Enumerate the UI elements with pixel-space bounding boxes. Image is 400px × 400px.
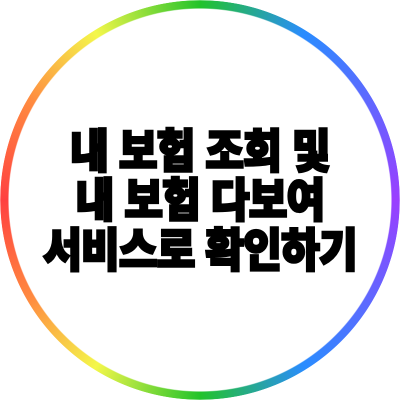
title: 서비스로 확인하기: [43, 225, 357, 276]
title: 내 보험 다보여: [76, 175, 324, 226]
title: 내 보험 조회 및: [70, 126, 330, 177]
